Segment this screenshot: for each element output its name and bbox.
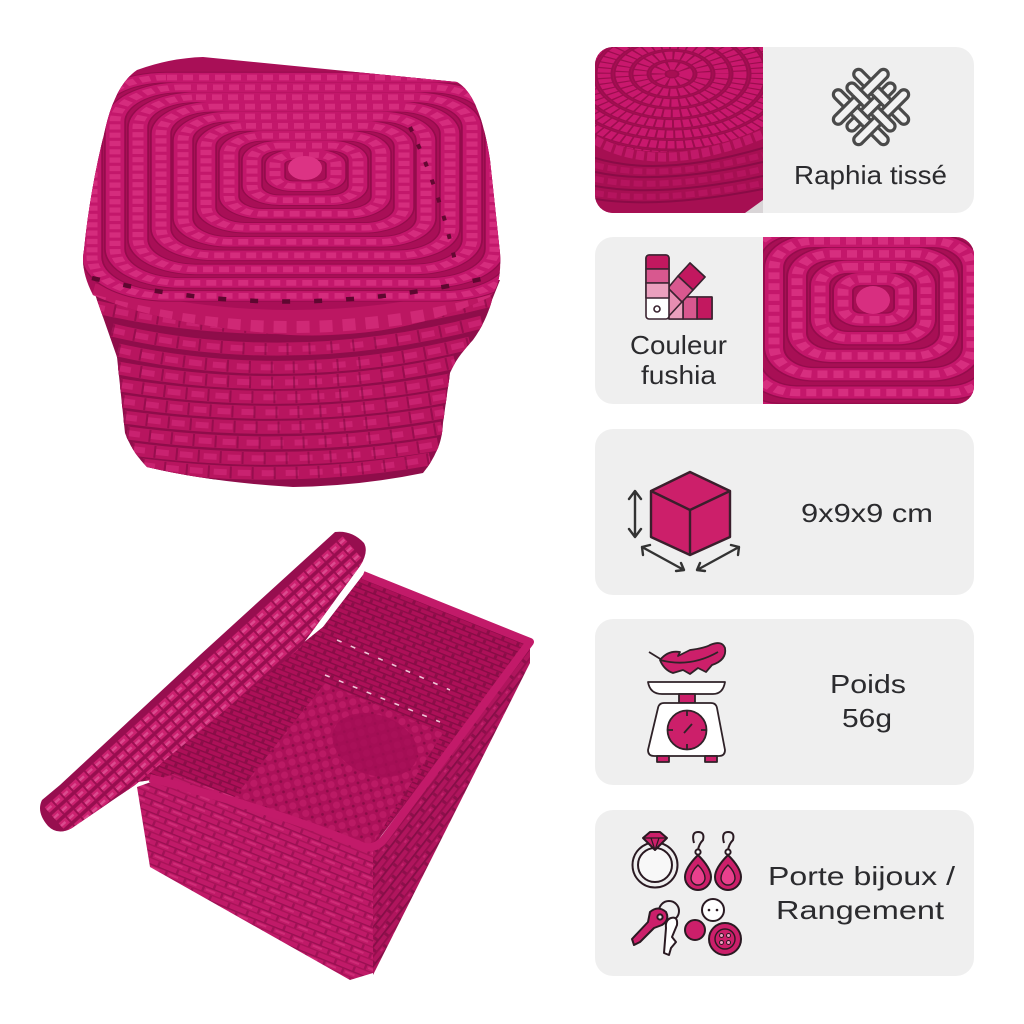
open lid	[40, 532, 366, 832]
floor centre swirl	[323, 702, 427, 788]
basket body	[90, 280, 500, 487]
front wall	[137, 774, 373, 980]
label: usage: Rangement	[776, 895, 945, 925]
basket inner right wall	[372, 640, 530, 845]
basket rim	[150, 575, 530, 847]
basket floor	[230, 683, 443, 845]
panel: dimensions	[595, 429, 974, 595]
label: dimensions: 9x9x9 cm	[801, 498, 933, 528]
openings in back wall	[325, 640, 450, 722]
card background	[595, 810, 974, 976]
thumbnail: fuchsia coils	[763, 237, 974, 404]
icon: woven strands	[819, 55, 923, 159]
right wall	[373, 640, 530, 975]
panel: colour	[595, 237, 974, 404]
card background	[595, 237, 974, 404]
label: colour	[630, 330, 727, 390]
basket interior left wall	[130, 627, 325, 803]
icon: colour swatches	[646, 255, 712, 319]
photo: open raffia basket with lid	[40, 532, 530, 980]
icon: jewellery, keys and buttons	[632, 832, 741, 955]
panel: weight	[595, 619, 974, 785]
icon: feather on scale	[648, 643, 725, 762]
label: colour: fushia	[641, 360, 717, 390]
label: weight: Poids	[830, 669, 906, 699]
label: usage: Porte bijoux /	[768, 861, 956, 891]
panel: raffia	[595, 47, 974, 213]
basket lid with concentric coils	[83, 57, 518, 336]
label: weight: 56g	[842, 703, 892, 733]
label: weight	[830, 669, 906, 733]
thumbnail: raffia weave	[595, 47, 763, 213]
basket interior back wall	[323, 575, 530, 733]
photo: closed raffia basket	[83, 57, 518, 487]
card background	[595, 429, 974, 595]
label: raffia: Raphia tissé	[794, 160, 947, 190]
icon: cube with arrows	[629, 472, 739, 571]
label: usage	[768, 861, 956, 925]
card background	[595, 619, 974, 785]
label: colour: Couleur	[630, 330, 727, 360]
card background	[595, 47, 974, 213]
panel: usage	[595, 810, 974, 976]
basket interior base	[130, 575, 530, 848]
